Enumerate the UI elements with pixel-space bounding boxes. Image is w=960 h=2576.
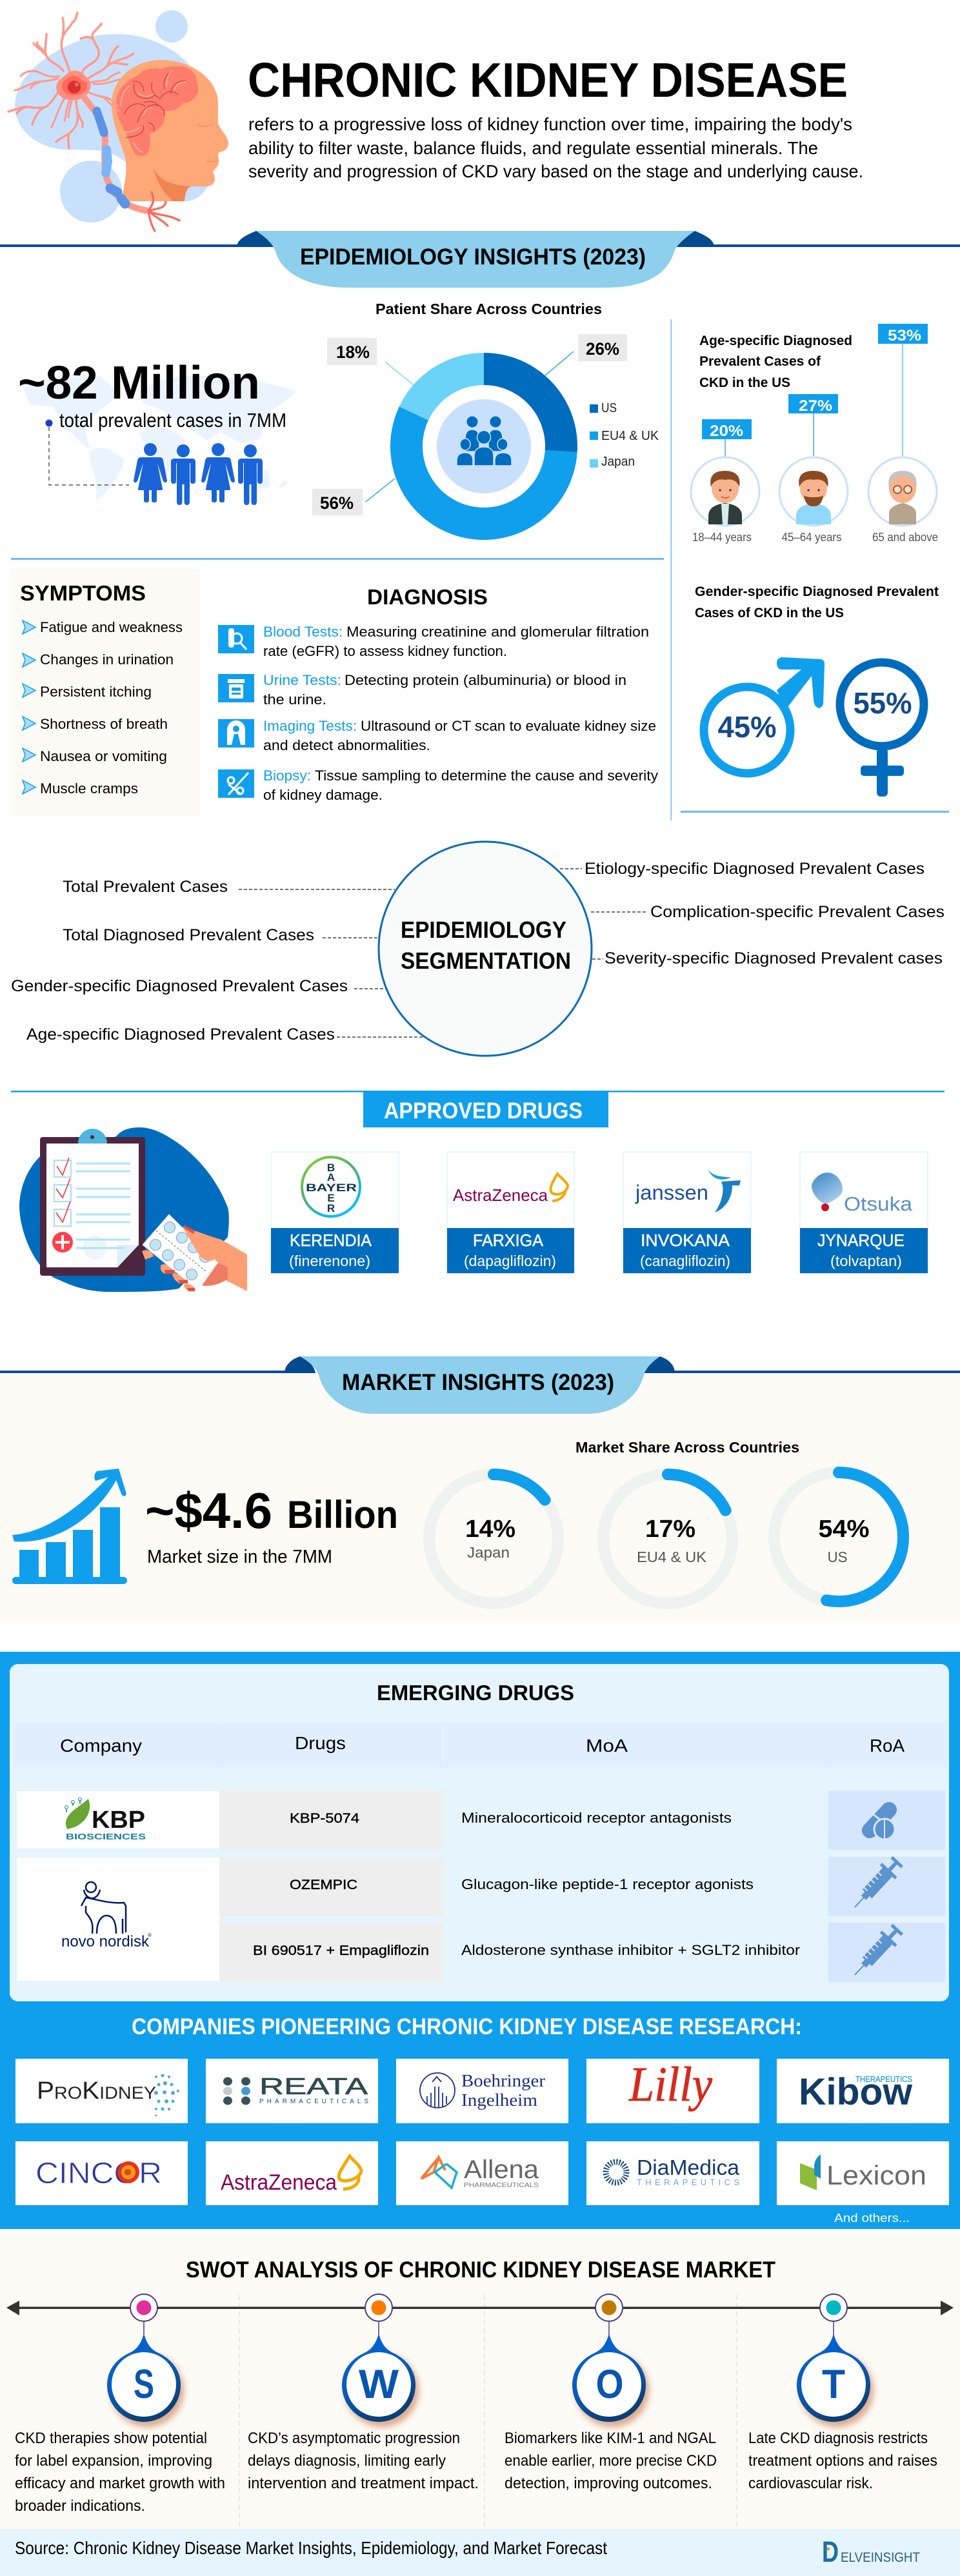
- drug card: jynarque: (tolvaptan): [830, 1253, 902, 1269]
- logo: diamedica: [586, 2141, 759, 2205]
- diagnosis: blood tests: rate (eGFR) to assess kidney function.: [263, 643, 507, 659]
- age group: 65 and above: 65 and above: [872, 531, 938, 544]
- ring: eu4 and uk: [603, 1474, 732, 1603]
- symptom list: Changes in urination: [40, 651, 174, 668]
- callout: 18%: [327, 338, 414, 385]
- logo: allena: PHARMACEUTICALS: [464, 2182, 539, 2189]
- ring: us: US: [827, 1549, 848, 1565]
- hand: [183, 1227, 247, 1291]
- logo: bayer: A: [327, 1171, 335, 1184]
- row: KBP-5074: KBP-5074: [290, 1811, 359, 1826]
- icon: growth chart: [12, 1469, 127, 1584]
- logo: bayer: B: [327, 1162, 335, 1174]
- logo: diamedica: DiaMedica: [637, 2155, 740, 2179]
- callout: 56%: 56%: [320, 493, 354, 513]
- ring: eu4 and uk: 17%: [645, 1516, 695, 1543]
- row: OZEMPIC: OZEMPIC: [290, 1878, 357, 1892]
- legend: countries: US: [601, 401, 617, 415]
- row: KBP-5074: Mineralocorticoid receptor antagonists: [461, 1810, 732, 1826]
- heading: gender-specific: Cases of CKD in the US: [695, 606, 844, 620]
- blue background band: [0, 1652, 960, 2229]
- heading: age-specific: Prevalent Cases of: [699, 354, 821, 369]
- swot column: threat: [748, 2294, 937, 2492]
- heading: emerging drugs: EMERGING DRUGS: [377, 1681, 574, 1705]
- logo: janssen: [635, 1169, 741, 1213]
- drug card: invokana: [623, 1152, 751, 1273]
- swot column: strength: CKD therapies show potential: [15, 2430, 207, 2447]
- logo: lexicon: [777, 2141, 949, 2205]
- icon: male symbol 45%: [704, 657, 825, 773]
- section banner: epidemiology insights: EPIDEMIOLOGY INSIGHTS (2023): [300, 244, 646, 270]
- row: BI 690517 + Empagliflozin: BI 690517 + Empagliflozin: [253, 1943, 429, 1958]
- symptom list: Muscle cramps: [40, 780, 138, 797]
- age group: 45-64: [779, 394, 848, 544]
- logo: bayer: E: [327, 1192, 335, 1204]
- age group: 65 and above: [868, 324, 938, 544]
- icon: imaging: [218, 719, 254, 748]
- icon: people: [134, 443, 263, 505]
- diagnosis: blood tests: Blood Tests:: [263, 624, 343, 640]
- novo nordisk logo: ®: [148, 1932, 152, 1938]
- ring: japan: 14%: [465, 1516, 515, 1543]
- table header: RoA: [870, 1736, 905, 1756]
- logo: bayer: R: [327, 1202, 335, 1214]
- drug card: invokana: INVOKANA: [641, 1231, 730, 1250]
- patient share heading: Patient Share Across Countries: [375, 301, 602, 317]
- epidemiology segmentation diagram: Severity-specific Diagnosed Prevalent cases: [605, 949, 943, 967]
- logo: kibow: [777, 2059, 949, 2123]
- swot column: threat: cardiovascular risk.: [748, 2475, 873, 2492]
- swot column: threat: Late CKD diagnosis restricts: [748, 2430, 928, 2447]
- approved drugs heading: [11, 1091, 945, 1127]
- ring: us: [774, 1472, 903, 1601]
- logo: lexicon: Lexicon: [826, 2160, 926, 2190]
- ring: japan: Japan: [467, 1544, 510, 1561]
- age group: 65 and above: 53%: [888, 327, 921, 344]
- logo: cincor: CINCOR: [35, 2156, 162, 2190]
- intro text: refers to a progressive loss of kidney function over time, impairing the body's: [248, 114, 852, 134]
- market panel background: [0, 1372, 960, 1621]
- swot column: strength: efficacy and market growth with: [15, 2475, 225, 2492]
- swot column: opportunity: enable earlier, more precise CKD: [505, 2452, 717, 2470]
- epidemiology segmentation diagram: SEGMENTATION: [401, 947, 571, 974]
- symptom list: Persistent itching: [40, 684, 152, 700]
- swot column: opportunity: detection, improving outcomes.: [505, 2475, 712, 2492]
- row: BI 690517 + Empagliflozin: [219, 1921, 945, 1982]
- drug card: farxiga: FARXIGA: [473, 1231, 544, 1250]
- diagnosis: biopsy: Biopsy:: [263, 768, 311, 784]
- age group: 45-64: 45–64 years: [782, 531, 841, 544]
- age group: 18-44: 18–44 years: [692, 531, 752, 544]
- note: and others: And others...: [834, 2212, 910, 2224]
- logo: reata: PHARMACEUTICALS: [259, 2098, 368, 2105]
- panel: symptoms: [11, 569, 200, 817]
- world map backdrop: [24, 375, 297, 500]
- icon: pills: [870, 1810, 895, 1839]
- footer: [0, 2529, 960, 2576]
- logo: bayer: BAYER: [306, 1182, 357, 1194]
- logo: diamedica: THERAPEUTICS: [637, 2177, 739, 2187]
- heading: symptoms: SYMPTOMS: [20, 581, 146, 605]
- drug card: kerendia: (finerenone): [289, 1253, 370, 1269]
- swot column: opportunity: [505, 2294, 717, 2492]
- logo: boehringer ingelheim: Boehringer: [461, 2071, 545, 2090]
- logo: lilly: Lilly: [628, 2057, 712, 2112]
- stat caption: total prevalent cases in 7MM: [59, 409, 286, 431]
- logo: astrazeneca: [453, 1174, 568, 1205]
- stat: market size: [145, 1482, 398, 1567]
- logo: kbp: KBP: [92, 1807, 145, 1834]
- legend: countries: EU4 & UK: [601, 429, 659, 443]
- row: KBP-5074: [17, 1790, 945, 1850]
- heading: swot: SWOT ANALYSIS OF CHRONIC KIDNEY DISEASE MARKET: [186, 2257, 775, 2283]
- diagnosis: imaging tests: and detect abnormalities.: [263, 737, 430, 753]
- diagnosis: urine tests: Detecting protein (albuminuria) or blood in: [345, 672, 626, 688]
- table header: Company: [60, 1736, 142, 1756]
- swot timeline: [6, 2295, 954, 2529]
- icon: male symbol 45%: 45%: [717, 710, 777, 744]
- logo: kbp: [65, 1798, 146, 1841]
- epidemiology segmentation diagram: [11, 842, 945, 1056]
- logo: reata: [206, 2059, 378, 2123]
- swot column: strength: for label expansion, improving: [15, 2452, 212, 2470]
- age group: 18-44: [691, 419, 759, 544]
- age group: 18-44: 20%: [710, 422, 743, 440]
- stat: market size: ~$4.6: [145, 1482, 272, 1539]
- diagnosis: imaging tests: Ultrasound or CT scan to evaluate kidney size: [361, 718, 656, 734]
- swot background: [0, 2234, 960, 2529]
- panel: emerging drugs: [10, 1664, 949, 2001]
- table header: MoA: [586, 1736, 628, 1756]
- heading: age-specific: CKD in the US: [699, 375, 790, 390]
- icon: female symbol 55%: 55%: [853, 686, 912, 720]
- epidemiology segmentation diagram: Gender-specific Diagnosed Prevalent Cases: [11, 977, 348, 995]
- logo: allena: Allena: [464, 2155, 539, 2184]
- logo: boehringer ingelheim: [396, 2059, 568, 2123]
- symptom list: Nausea or vomiting: [40, 748, 167, 764]
- heading: market share: Market Share Across Countries: [575, 1439, 799, 1456]
- intro text: ability to filter waste, balance fluids, and regulate essential minerals. The: [248, 138, 818, 158]
- logo: delveinsight: ELVEINSIGHT: [841, 2550, 920, 2565]
- swot column: weakness: delays diagnosis, limiting early: [248, 2452, 446, 2470]
- stat: market size: Billion: [287, 1493, 398, 1536]
- icon: female symbol 55%: [840, 662, 924, 797]
- ring: japan: [429, 1474, 558, 1603]
- approved drugs heading: APPROVED DRUGS: [384, 1098, 583, 1124]
- logo: bayer: [302, 1157, 360, 1216]
- section banner: market insights: MARKET INSIGHTS (2023): [342, 1370, 614, 1395]
- title: CHRONIC KIDNEY DISEASE: [248, 53, 848, 107]
- axon: [83, 95, 148, 211]
- heading: gender-specific: [695, 584, 939, 620]
- logo: astrazeneca: [206, 2141, 378, 2205]
- section banner: epidemiology insights: [0, 231, 960, 288]
- stat: market size: Market size in the 7MM: [147, 1547, 332, 1567]
- swot column: weakness: [248, 2294, 479, 2492]
- swot column: strength: S: [134, 2362, 154, 2407]
- row: OZEMPIC: [219, 1854, 945, 1916]
- heading: companies: COMPANIES PIONEERING CHRONIC KIDNEY DISEASE RESEARCH:: [132, 2014, 802, 2039]
- diagnosis: biopsy: [218, 768, 659, 803]
- logo: astrazeneca: AstraZeneca: [221, 2170, 337, 2195]
- legend: countries: Japan: [601, 455, 635, 469]
- epidemiology segmentation diagram: Age-specific Diagnosed Prevalent Cases: [26, 1025, 335, 1044]
- icon: syringe: [847, 1854, 906, 1914]
- diagnosis: biopsy: Tissue sampling to determine the cause and severity: [315, 768, 659, 784]
- logo: allena: [396, 2141, 568, 2205]
- logo: reata: REATA: [259, 2073, 368, 2099]
- drug card: jynarque: [800, 1152, 928, 1273]
- swot column: opportunity: O: [596, 2362, 623, 2407]
- logo: kibow: Kibow: [799, 2071, 913, 2113]
- swot column: threat: T: [822, 2362, 845, 2407]
- logo: cincor: [15, 2141, 188, 2205]
- header illustration: neuron and head: [8, 10, 228, 231]
- epidemiology segmentation diagram: EPIDEMIOLOGY: [401, 916, 566, 943]
- symptom list: Fatigue and weakness: [40, 619, 183, 635]
- drug card: kerendia: [271, 1152, 399, 1273]
- swot column: strength: [15, 2294, 225, 2515]
- icon: crowd: [457, 417, 512, 466]
- novo nordisk logo: novo nordisk: [61, 1933, 150, 1950]
- icon: urine test: [218, 674, 254, 702]
- swot column: opportunity: Biomarkers like KIM-1 and NGAL: [505, 2430, 716, 2447]
- logo: prokidney: [15, 2059, 188, 2123]
- diagnosis: urine tests: [218, 672, 626, 708]
- icon: biopsy: [218, 769, 254, 798]
- logo: janssen: janssen: [635, 1181, 708, 1204]
- callout: 56%: [312, 479, 395, 515]
- swot column: weakness: W: [359, 2362, 399, 2407]
- heading: age-specific: Age-specific Diagnosed: [699, 333, 852, 348]
- diagnosis: urine tests: the urine.: [263, 691, 326, 708]
- swot column: weakness: intervention and treatment impact.: [248, 2475, 479, 2492]
- symptom list: [40, 619, 183, 797]
- epidemiology segmentation diagram: Total Diagnosed Prevalent Cases: [63, 926, 314, 944]
- epidemiology segmentation diagram: Complication-specific Prevalent Cases: [650, 903, 945, 921]
- legend: countries: [590, 401, 659, 469]
- logo: delveinsight: [822, 2535, 920, 2568]
- diagnosis: biopsy: of kidney damage.: [263, 787, 383, 803]
- logo: kibow: THERAPEUTICS: [855, 2074, 912, 2084]
- neuron dendrites: [8, 13, 134, 148]
- callout: 26%: [545, 334, 627, 375]
- row: OZEMPIC: Glucagon-like peptide-1 receptor agonists: [461, 1876, 754, 1892]
- dividers: [11, 319, 949, 820]
- epidemiology segmentation diagram: Total Prevalent Cases: [63, 878, 228, 896]
- row: BI 690517 + Empagliflozin: Aldosterone synthase inhibitor + SGLT2 inhibitor: [461, 1942, 800, 1958]
- age group: 45-64: 27%: [799, 397, 832, 415]
- icon: blood test: [218, 625, 254, 653]
- icon: bullet arrows: [23, 620, 35, 794]
- illustration: clipboard and pills: [19, 1127, 247, 1292]
- table header: [15, 1723, 948, 1767]
- donut chart: patient share: [312, 334, 627, 540]
- swot column: threat: treatment options and raises: [748, 2452, 937, 2470]
- callout: 26%: 26%: [586, 339, 619, 359]
- novo nordisk logo: [17, 1858, 219, 1981]
- drug card: farxiga: [447, 1152, 574, 1273]
- drug card: jynarque: JYNARQUE: [817, 1231, 905, 1250]
- logo: astrazeneca: AstraZeneca: [453, 1185, 548, 1205]
- source line: Source: Chronic Kidney Disease Market Insights, Epidemiology, and Market Forecast: [15, 2538, 607, 2558]
- logo: kbp: BIOSCIENCES: [66, 1832, 146, 1841]
- intro text: [248, 114, 863, 181]
- diagnosis: blood tests: [218, 624, 649, 659]
- logo: boehringer ingelheim: Ingelheim: [461, 2090, 537, 2110]
- swot column: strength: broader indications.: [15, 2497, 145, 2515]
- drug card: kerendia: KERENDIA: [290, 1231, 372, 1250]
- logo: delveinsight: D: [822, 2535, 839, 2568]
- icon: syringe: [847, 1921, 906, 1982]
- diagnosis: imaging tests: Imaging Tests:: [263, 718, 357, 734]
- diagnosis: blood tests: Measuring creatinine and glomerular filtration: [346, 624, 649, 640]
- swot column: weakness: CKD’s asymptomatic progression: [248, 2430, 460, 2447]
- section banner: market insights: [0, 1356, 960, 1414]
- logo: prokidney: ProKidney: [37, 2077, 156, 2105]
- diagnosis: imaging tests: [218, 718, 656, 753]
- drug card: farxiga: (dapagliflozin): [464, 1253, 556, 1269]
- stat: 82 million: ~82 Million: [18, 357, 260, 409]
- logo: otsuka: Otsuka: [844, 1193, 913, 1215]
- drug card: invokana: (canagliflozin): [640, 1253, 730, 1269]
- diagnosis: urine tests: Urine Tests:: [263, 672, 341, 688]
- ring: eu4 and uk: EU4 & UK: [637, 1549, 707, 1565]
- logo: lilly: [586, 2057, 759, 2123]
- table header: Drugs: [295, 1733, 346, 1753]
- symptom list: Shortness of breath: [40, 716, 168, 732]
- heading: age-specific: [699, 333, 852, 390]
- ring: us: 54%: [818, 1516, 870, 1543]
- intro text: severity and progression of CKD vary based on the stage and underlying cause.: [248, 161, 863, 181]
- epidemiology segmentation diagram: Etiology-specific Diagnosed Prevalent Cases: [585, 860, 925, 878]
- heading: diagnosis: DIAGNOSIS: [367, 585, 488, 609]
- callout: 18%: 18%: [336, 342, 370, 362]
- connector to people: [45, 419, 129, 485]
- logo: otsuka: [812, 1173, 913, 1215]
- heading: gender-specific: Gender-specific Diagnosed Prevalent: [695, 584, 939, 599]
